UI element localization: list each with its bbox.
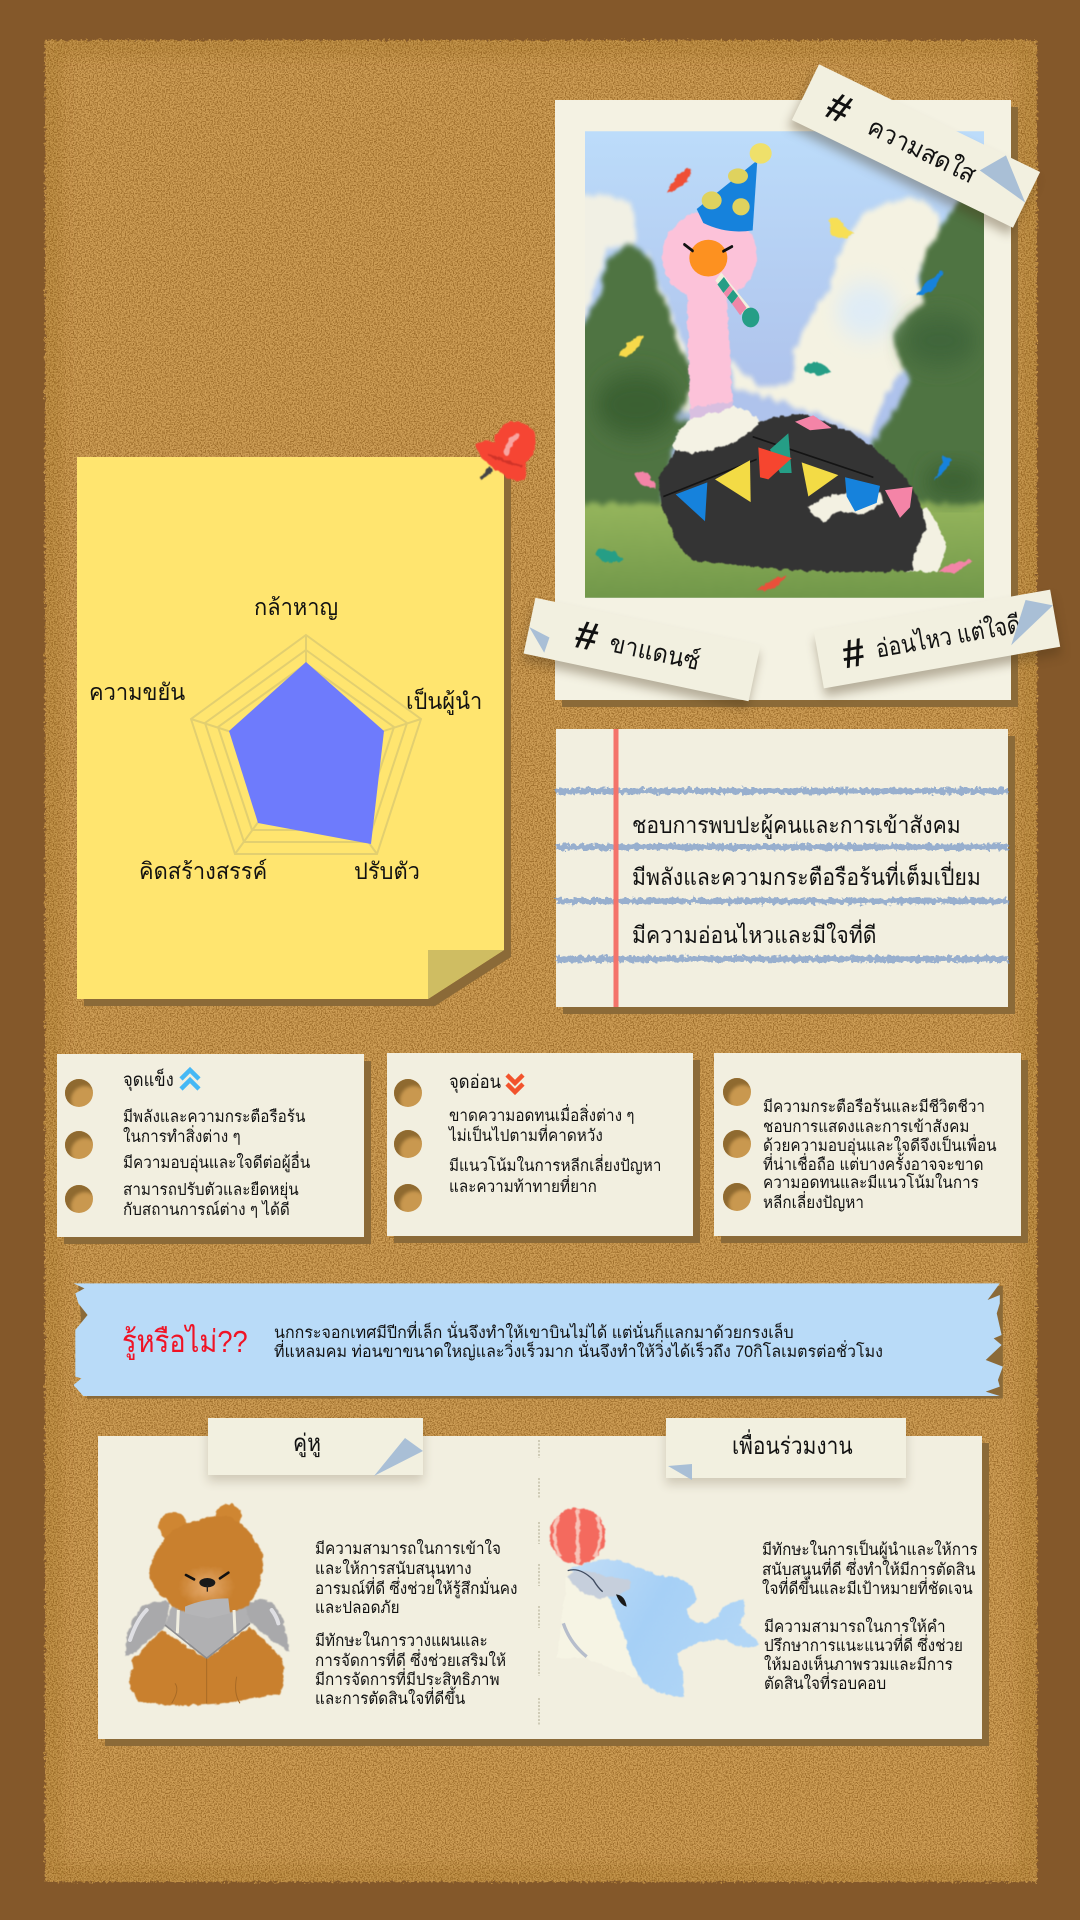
- banner text: [274, 1321, 883, 1361]
- icon: folded corner: [668, 1464, 692, 1480]
- icon: folded corner: [1011, 600, 1053, 645]
- radar labels: ความขยัน: [89, 679, 185, 705]
- panel: lined notes: [556, 729, 1008, 1007]
- illustration: armored bear: [124, 1502, 290, 1708]
- coworker description: สนับสนุนที่ดี ซึ่งทำให้มีการตัดสิน: [762, 1561, 975, 1579]
- radar labels: คิดสร้างสรรค์: [139, 858, 267, 884]
- radar labels: กล้าหาญ: [254, 594, 338, 620]
- tag text: ความสดใส: [863, 113, 980, 189]
- illustration: party ostrich: [585, 131, 984, 598]
- strengths list: สามารถปรับตัวและยืดหยุ่น: [123, 1181, 299, 1199]
- strengths list: มีพลังและความกระตือรือร้น: [123, 1108, 305, 1126]
- panel: weaknesses: [387, 1053, 693, 1236]
- weaknesses list: [448, 1104, 661, 1196]
- sticky note paper: [77, 457, 511, 1006]
- radar labels: เป็นผู้นำ: [406, 688, 482, 714]
- strengths list: ในการทำสิ่งต่าง ๆ: [123, 1128, 241, 1146]
- icon: folded corner: [980, 156, 1026, 202]
- partner description: มีความสามารถในการเข้าใจ: [315, 1540, 501, 1558]
- summary text: ด้วยความอบอุ่นและใจดีจึงเป็นเพื่อน: [763, 1137, 997, 1155]
- radar labels: [89, 594, 482, 884]
- partner description: [315, 1539, 517, 1708]
- ruled lines: [554, 729, 1010, 1007]
- coworker description: ใจที่ดีขึ้นและมีเป้าหมายที่ชัดเจน: [762, 1580, 973, 1598]
- weaknesses list: มีแนวโน้มในการหลีกเลี่ยงปัญหา: [449, 1157, 661, 1175]
- panel: compatibility: [98, 1436, 982, 1739]
- hash mark: #: [571, 612, 602, 660]
- tag: ขาแดนซ์: [524, 598, 760, 701]
- tag: partner: [208, 1418, 423, 1475]
- icon: red push pin: [475, 420, 536, 482]
- list text: [632, 812, 981, 948]
- coworker description: มีความสามารถในการให้คำ: [764, 1618, 946, 1636]
- weaknesses list: ขาดความอดทนเมื่อสิ่งต่าง ๆ: [449, 1107, 634, 1125]
- hash mark: #: [839, 630, 868, 677]
- partner description: การจัดการที่ดี ซึ่งช่วยเสริมให้: [315, 1652, 506, 1670]
- partner description: และการตัดสินใจที่ดีขึ้น: [315, 1690, 465, 1708]
- coworker description: ให้มองเห็นภาพรวมและมีการ: [764, 1656, 953, 1674]
- list text: มีพลังและความกระตือรือร้นที่เต็มเปี่ยม: [632, 864, 981, 890]
- banner text: นกกระจอกเทศมีปีกที่เล็ก นั่นจึงทำให้เขาบินไม่ได้ แต่นั่นก็แลกมาด้วยกรงเล็บ: [274, 1324, 794, 1342]
- coworker description: ปรึกษาการแนะแนวที่ดี ซึ่งช่วย: [764, 1637, 963, 1655]
- summary text: มีความกระตือรือร้นและมีชีวิตชีวา: [763, 1098, 985, 1116]
- partner description: มีทักษะในการวางแผนและ: [315, 1632, 488, 1650]
- heading: strengths: จุดแข็ง: [123, 1069, 174, 1090]
- partner description: และให้การสนับสนุนทาง: [315, 1560, 472, 1578]
- panel: strengths: [57, 1054, 364, 1237]
- centre fold specks: [538, 1440, 540, 1724]
- panel: sticky note with radar chart: [77, 457, 511, 1006]
- radar chart: [190, 634, 422, 855]
- strengths list: กับสถานการณ์ต่าง ๆ ได้ดี: [123, 1201, 290, 1219]
- coworker description: ตัดสินใจที่รอบคอบ: [764, 1675, 886, 1693]
- icon: folded corner: [374, 1438, 423, 1476]
- coworker description: [762, 1540, 978, 1693]
- list text: ชอบการพบปะผู้คนและการเข้าสังคม: [632, 812, 961, 838]
- banner heading: รู้หรือไม่??: [122, 1324, 248, 1359]
- hash mark: #: [819, 84, 858, 133]
- heading: weaknesses: จุดอ่อน: [449, 1071, 501, 1092]
- tag: อ่อนไหว แต่ใจดี: [814, 590, 1060, 688]
- list text: มีความอ่อนไหวและมีใจที่ดี: [632, 922, 877, 948]
- weaknesses list: และความท้าทายที่ยาก: [449, 1178, 597, 1196]
- summary text: ชอบการแสดงและการเข้าสังคม: [763, 1118, 969, 1136]
- banner: did you know: [74, 1283, 1003, 1399]
- partner description: อารมณ์ที่ดี ซึ่งช่วยให้รู้สึกมั่นคง: [315, 1580, 517, 1598]
- partner description: มีการจัดการที่มีประสิทธิภาพ: [315, 1671, 500, 1689]
- strengths list: [123, 1108, 310, 1219]
- icon: double chevron up: [180, 1067, 200, 1091]
- banner text: ที่แหลมคม ท่อนขาขนาดใหญ่และวิ่งเร็วมาก นั่นจึงทำให้วิ่งได้เร็วถึง 70กิโลเมตรต่อชั่วโมง: [274, 1343, 883, 1361]
- illustration: dolphin with ball: [549, 1506, 760, 1698]
- strengths list: มีความอบอุ่นและใจดีต่อผู้อื่น: [123, 1154, 310, 1172]
- tag text: อ่อนไหว แต่ใจดี: [874, 611, 1023, 664]
- summary text: หลีกเลี่ยงปัญหา: [763, 1194, 864, 1212]
- tag heading: เพื่อนร่วมงาน: [732, 1433, 853, 1460]
- panel: summary: [714, 1053, 1021, 1236]
- coworker description: มีทักษะในการเป็นผู้นำและให้การ: [762, 1541, 978, 1559]
- icon: folded corner: [529, 627, 550, 653]
- summary text: [763, 1098, 997, 1212]
- tag text: ขาแดนซ์: [607, 629, 702, 676]
- weaknesses list: ไม่เป็นไปตามที่คาดหวัง: [449, 1127, 603, 1145]
- tag: coworker: [666, 1418, 906, 1478]
- tag: ความสดใส: [792, 64, 1040, 228]
- radar labels: ปรับตัว: [354, 858, 420, 884]
- tag heading: คู่หู: [293, 1430, 321, 1457]
- icon: double chevron down: [506, 1073, 524, 1095]
- panel: photo frame: [555, 100, 1018, 707]
- summary text: ที่น่าเชื่อถือ แต่บางครั้งอาจจะขาด: [763, 1156, 984, 1174]
- torn tape shape: [74, 1283, 1003, 1399]
- summary text: ความอดทนและมีแนวโน้มในการ: [763, 1174, 979, 1192]
- partner description: และปลอดภัย: [315, 1599, 400, 1617]
